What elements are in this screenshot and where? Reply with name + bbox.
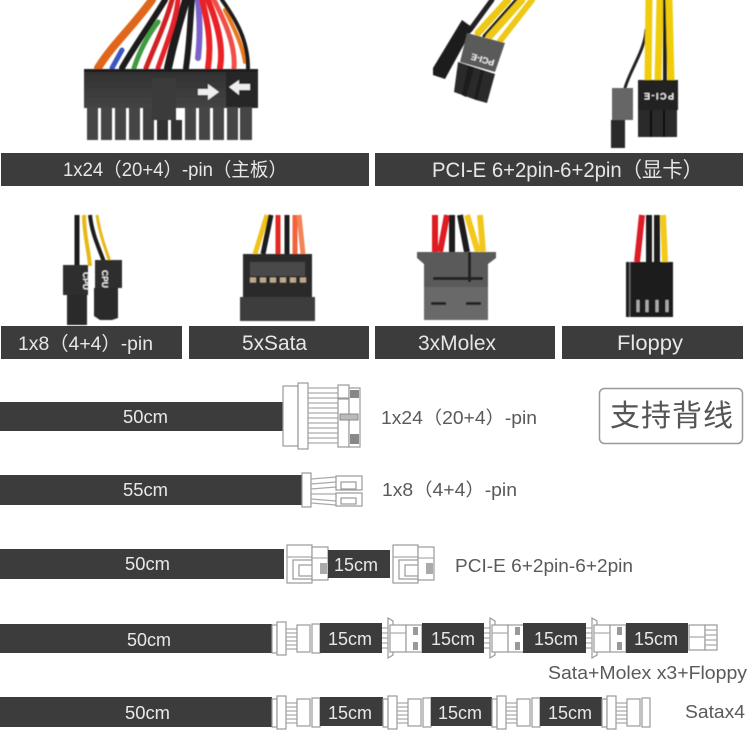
photo: Floppy connector	[626, 215, 673, 317]
cable 5 label: Satax4	[685, 702, 745, 722]
cable 2: 8-pin 55cm: 55cm	[123, 480, 168, 500]
cable 4: SATA + Molex x3 + Floppy: 15cm	[328, 629, 372, 649]
photo: Molex connector	[417, 215, 496, 320]
label bar: SATA	[189, 326, 369, 359]
callout: rear routing support	[600, 388, 742, 444]
cable 1: 24-pin 50cm: 50cm	[123, 407, 168, 427]
label bar: 24-pin	[1, 153, 369, 186]
photo: SATA connector	[240, 215, 315, 321]
cable 3: PCI-E 50cm + 15cm: 50cm	[125, 554, 170, 574]
cable 5: SATA x4: 15cm	[328, 703, 372, 723]
cable 3 label: PCI-E 6+2pin-6+2pin	[455, 556, 633, 576]
photo: PCI-E right connector	[611, 0, 678, 148]
label bar: CPU	[1, 326, 182, 359]
label bar: Floppy: Floppy	[617, 332, 684, 355]
cable 4: SATA + Molex x3 + Floppy: 15cm	[431, 629, 475, 649]
photo: CPU connectors	[63, 215, 122, 325]
label bar: 24-pin: 1x24（20+4）-pin（主板）	[63, 159, 287, 181]
cable 5: SATA x4	[0, 696, 650, 729]
cable 5: SATA x4: 50cm	[125, 703, 170, 723]
cable 3: PCI-E 50cm + 15cm	[0, 545, 434, 583]
cable 5: SATA x4: 15cm	[438, 703, 482, 723]
label bar: PCI-E	[375, 153, 743, 186]
label bar: CPU: 1x8（4+4）-pin	[18, 333, 153, 355]
cable 2: 8-pin 55cm	[0, 473, 362, 507]
cable 2 label: 1x8（4+4）-pin	[382, 480, 517, 500]
photo: PCI-E left connector	[433, 0, 532, 103]
cable 1: 24-pin 50cm	[0, 383, 360, 449]
photo: PCI-E left connector: PCI-E	[470, 51, 496, 68]
cable 5: SATA x4: 15cm	[548, 703, 592, 723]
cable 4: SATA + Molex x3 + Floppy: 50cm	[127, 630, 171, 650]
cable 4: SATA + Molex x3 + Floppy	[0, 618, 717, 658]
label bar: Floppy	[562, 326, 743, 359]
label bar: PCI-E: PCI-E 6+2pin-6+2pin（显卡）	[432, 159, 703, 182]
cable 1 label: 1x24（20+4）-pin	[381, 408, 537, 428]
cable 4 label: Sata+Molex x3+Floppy	[548, 663, 747, 683]
label bar: SATA: 5xSata	[242, 332, 307, 355]
label bar: Molex	[375, 326, 555, 359]
callout: rear routing support: 支持背线	[610, 400, 733, 433]
photo: CPU connectors: CPU	[81, 272, 91, 290]
photo: PCI-E right connector: PCI-E	[644, 91, 674, 101]
photo: CPU connectors: CPU	[100, 270, 110, 288]
cable 3: PCI-E 50cm + 15cm: 15cm	[334, 555, 378, 575]
photo: 24-pin connector	[84, 0, 258, 140]
cable 4: SATA + Molex x3 + Floppy: 15cm	[634, 629, 678, 649]
label bar: Molex: 3xMolex	[418, 332, 496, 355]
cable 4: SATA + Molex x3 + Floppy: 15cm	[534, 629, 578, 649]
